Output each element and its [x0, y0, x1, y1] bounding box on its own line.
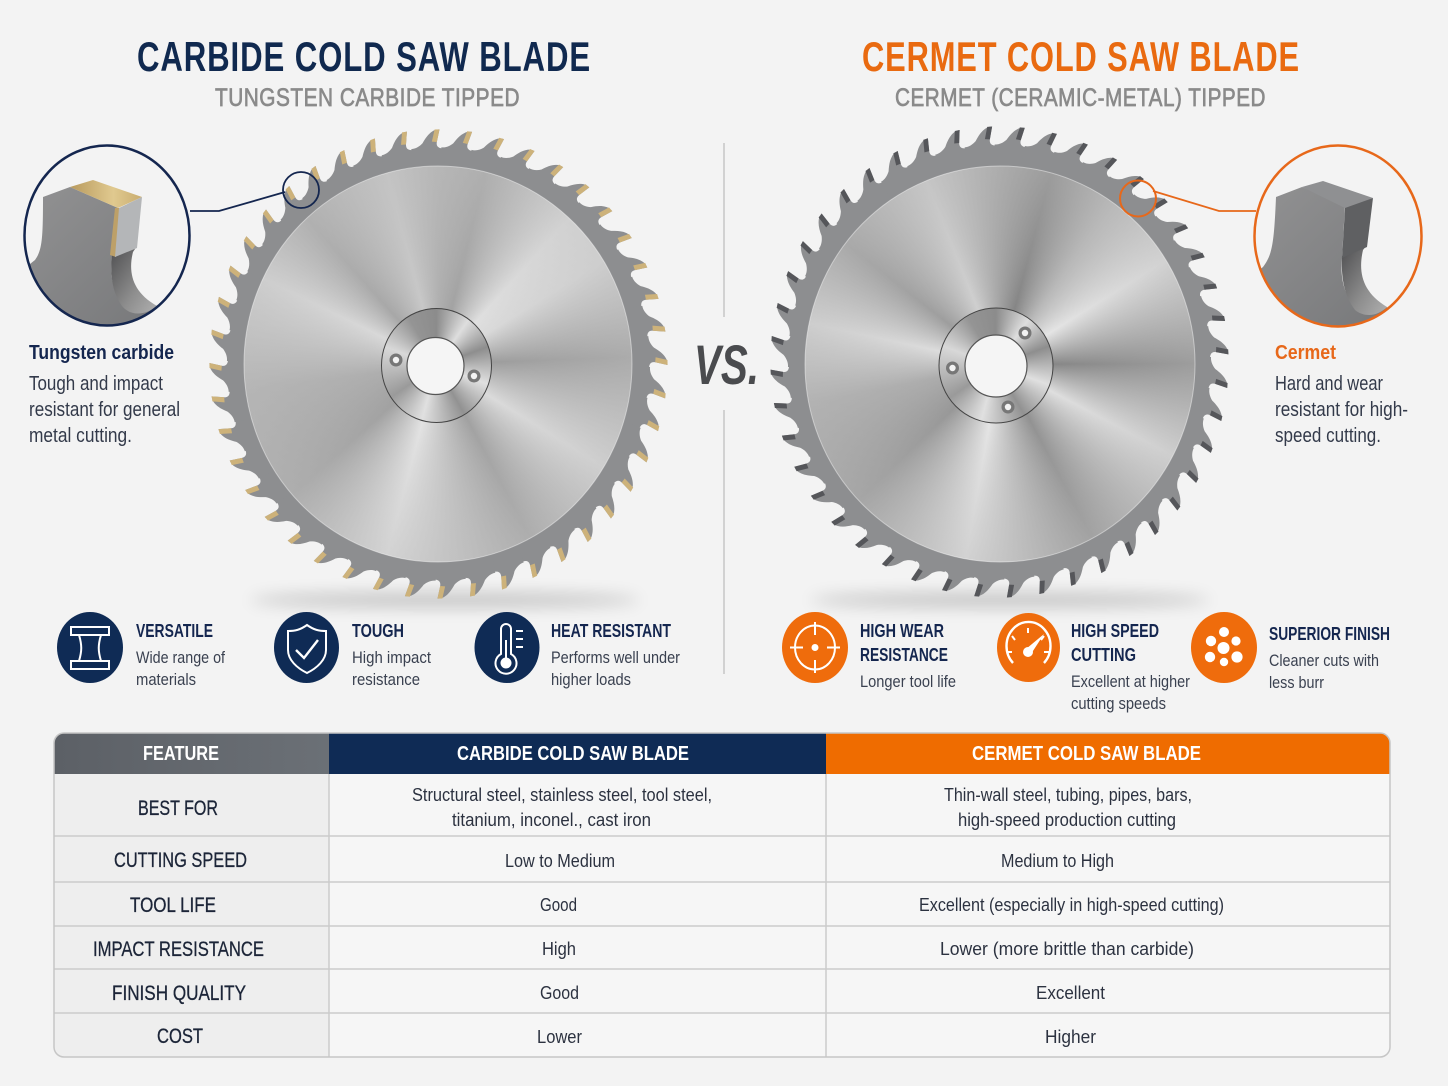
table header: FEATURE [143, 743, 219, 765]
title: cermet: CERMET COLD SAW BLADE [862, 33, 1300, 80]
title: cermet [862, 33, 1300, 112]
feature: high wear resistance: Longer tool life [860, 672, 956, 691]
saw blade: cermet [769, 125, 1230, 599]
icon: thermometer [474, 612, 540, 683]
table carbide column: High [542, 938, 576, 959]
feature: high speed cutting [997, 613, 1190, 713]
table header: CERMET COLD SAW BLADE [972, 743, 1201, 765]
table cermet column: Higher [1045, 1026, 1096, 1047]
table carbide column: titanium, inconel., cast iron [452, 809, 651, 830]
table cermet column [919, 784, 1224, 1047]
table cermet column: Lower (more brittle than carbide) [940, 938, 1194, 959]
table row labels: COST [157, 1025, 203, 1048]
saw blade: carbide [200, 120, 677, 608]
feature: tough: resistance [352, 670, 420, 689]
feature: heat resistant: HEAT RESISTANT [551, 621, 671, 641]
table header [143, 743, 1201, 765]
feature: versatile: VERSATILE [136, 621, 213, 641]
blade shadow: carbide [250, 593, 640, 607]
table cermet column: Excellent (especially in high-speed cutting) [919, 894, 1224, 915]
feature: high speed cutting: cutting speeds [1071, 694, 1166, 713]
title: carbide [137, 33, 591, 112]
table cermet column: Medium to High [1001, 850, 1114, 871]
table cermet column: Excellent [1036, 982, 1105, 1003]
inset image: carbide tooth [30, 180, 156, 324]
text block: cermet: Cermet [1275, 342, 1336, 364]
table row labels: IMPACT RESISTANCE [93, 938, 264, 961]
feature: versatile: Wide range of [136, 648, 225, 667]
table header: CARBIDE COLD SAW BLADE [457, 743, 689, 765]
text block: tungsten carbide: metal cutting. [29, 425, 132, 447]
feature: high wear resistance: HIGH WEAR [860, 621, 944, 641]
table row labels: FINISH QUALITY [112, 982, 246, 1005]
feature: superior finish: Cleaner cuts with [1269, 651, 1379, 670]
divider bottom [723, 410, 725, 674]
feature: high wear resistance: RESISTANCE [860, 645, 948, 665]
text block: cermet: Hard and wear [1275, 373, 1383, 395]
feature: versatile: materials [136, 670, 196, 689]
feature: high wear resistance [782, 612, 956, 691]
feature: tough [274, 612, 431, 689]
title: cermet: CERMET (CERAMIC-METAL) TIPPED [895, 84, 1266, 112]
feature: heat resistant: Performs well under [551, 648, 680, 667]
table row labels [93, 797, 264, 1048]
feature: tough: High impact [352, 648, 431, 667]
table cermet column: high-speed production cutting [958, 809, 1176, 830]
text block: cermet: speed cutting. [1275, 425, 1381, 447]
feature: superior finish: less burr [1269, 673, 1324, 692]
divider top [723, 143, 725, 317]
versus label: VS. [694, 333, 759, 396]
icon: shield [274, 612, 339, 683]
icon: gauge [997, 613, 1060, 682]
text block: cermet: resistant for high- [1275, 399, 1408, 421]
text block: tungsten carbide: Tungsten carbide [29, 342, 174, 364]
title: carbide: CARBIDE COLD SAW BLADE [137, 33, 591, 80]
table row labels: CUTTING SPEED [114, 849, 247, 872]
feature: superior finish [1191, 612, 1390, 692]
table carbide column: Good [540, 894, 577, 915]
table carbide column [412, 784, 712, 1047]
feature: superior finish: SUPERIOR FINISH [1269, 624, 1390, 644]
callout: cermet tooth zoom [1120, 146, 1422, 340]
icon: dots [1191, 612, 1257, 683]
comparison table [54, 733, 1390, 1057]
icon: crosshair [782, 612, 848, 683]
text block: cermet [1275, 342, 1408, 447]
feature: tough: TOUGH [352, 621, 404, 641]
table carbide column: Good [540, 982, 579, 1003]
feature: high speed cutting: Excellent at higher [1071, 672, 1190, 691]
table cermet column: Thin-wall steel, tubing, pipes, bars, [944, 784, 1192, 805]
title: carbide: TUNGSTEN CARBIDE TIPPED [215, 84, 520, 112]
text block: tungsten carbide: Tough and impact [29, 373, 163, 395]
blade shadow: cermet [810, 593, 1210, 607]
table carbide column: Lower [537, 1026, 582, 1047]
feature: versatile [57, 612, 225, 689]
table carbide column: Low to Medium [505, 850, 615, 871]
feature: heat resistant [474, 612, 680, 689]
callout: carbide tooth zoom [10, 146, 319, 340]
feature: high speed cutting: HIGH SPEED [1071, 621, 1159, 641]
text block: tungsten carbide: resistant for general [29, 399, 180, 421]
icon: i-beam [57, 612, 123, 683]
table row labels: TOOL LIFE [130, 894, 216, 917]
feature: heat resistant: higher loads [551, 670, 631, 689]
inset image: cermet tooth [1262, 181, 1388, 326]
table carbide column: Structural steel, stainless steel, tool steel, [412, 784, 712, 805]
table row labels: BEST FOR [138, 797, 218, 820]
feature: high speed cutting: CUTTING [1071, 645, 1136, 665]
text block: tungsten carbide [29, 342, 180, 447]
